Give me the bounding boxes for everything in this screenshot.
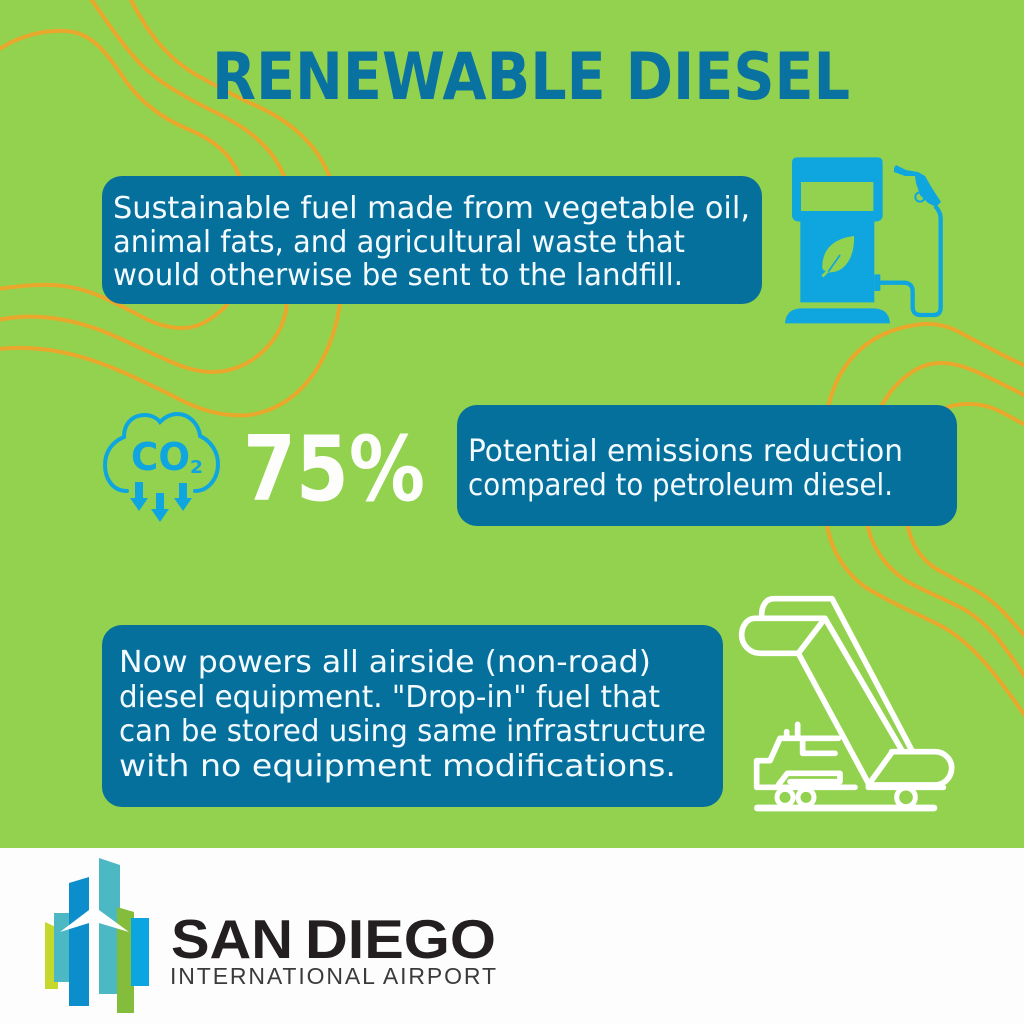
text: fuel description: would otherwise be sent to the landfill. (113, 258, 683, 293)
text: airside equipment: can be stored using same infrastructure (119, 714, 706, 749)
text: fuel description: animal fats, and agricultural waste that (113, 225, 685, 260)
text: fuel description (113, 191, 750, 293)
text: emissions reduction: Potential emissions reduction (468, 434, 903, 469)
logo wordmark (171, 908, 496, 970)
text: airside equipment: Now powers all airside (non-road) (119, 645, 651, 680)
panel: emissions reduction (457, 405, 957, 526)
panel: airside equipment (102, 625, 723, 807)
logo mark: skyline buildings (45, 858, 149, 1013)
text: airside equipment: diesel equipment. "Drop-in" fuel that (119, 680, 660, 715)
statistic: 75%: 75% (243, 417, 425, 522)
text: fuel description: Sustainable fuel made from vegetable oil, (113, 191, 750, 226)
logo tagline: INTERNATIONAL AIRPORT (170, 963, 496, 989)
logo wordmark: SAN (171, 908, 293, 970)
logo wordmark: DIEGO (305, 908, 496, 970)
logo: San Diego International Airport (45, 858, 496, 1013)
text: emissions reduction (468, 434, 903, 503)
footer band (0, 848, 1024, 1024)
panel: fuel description (102, 176, 762, 304)
icon: CO2 cloud with down arrows (105, 414, 218, 522)
title: RENEWABLE DIESEL (212, 40, 850, 115)
icon: CO2 cloud with down arrows: 2 (190, 457, 203, 478)
text: emissions reduction: compared to petroleum diesel. (468, 468, 893, 503)
icon: fuel pump with leaf (785, 157, 941, 323)
icon: airport stair truck (742, 599, 952, 808)
text: airside equipment (119, 645, 706, 784)
text: airside equipment: with no equipment modifications. (119, 749, 676, 784)
icon: CO2 cloud with down arrows: CO (131, 435, 190, 479)
